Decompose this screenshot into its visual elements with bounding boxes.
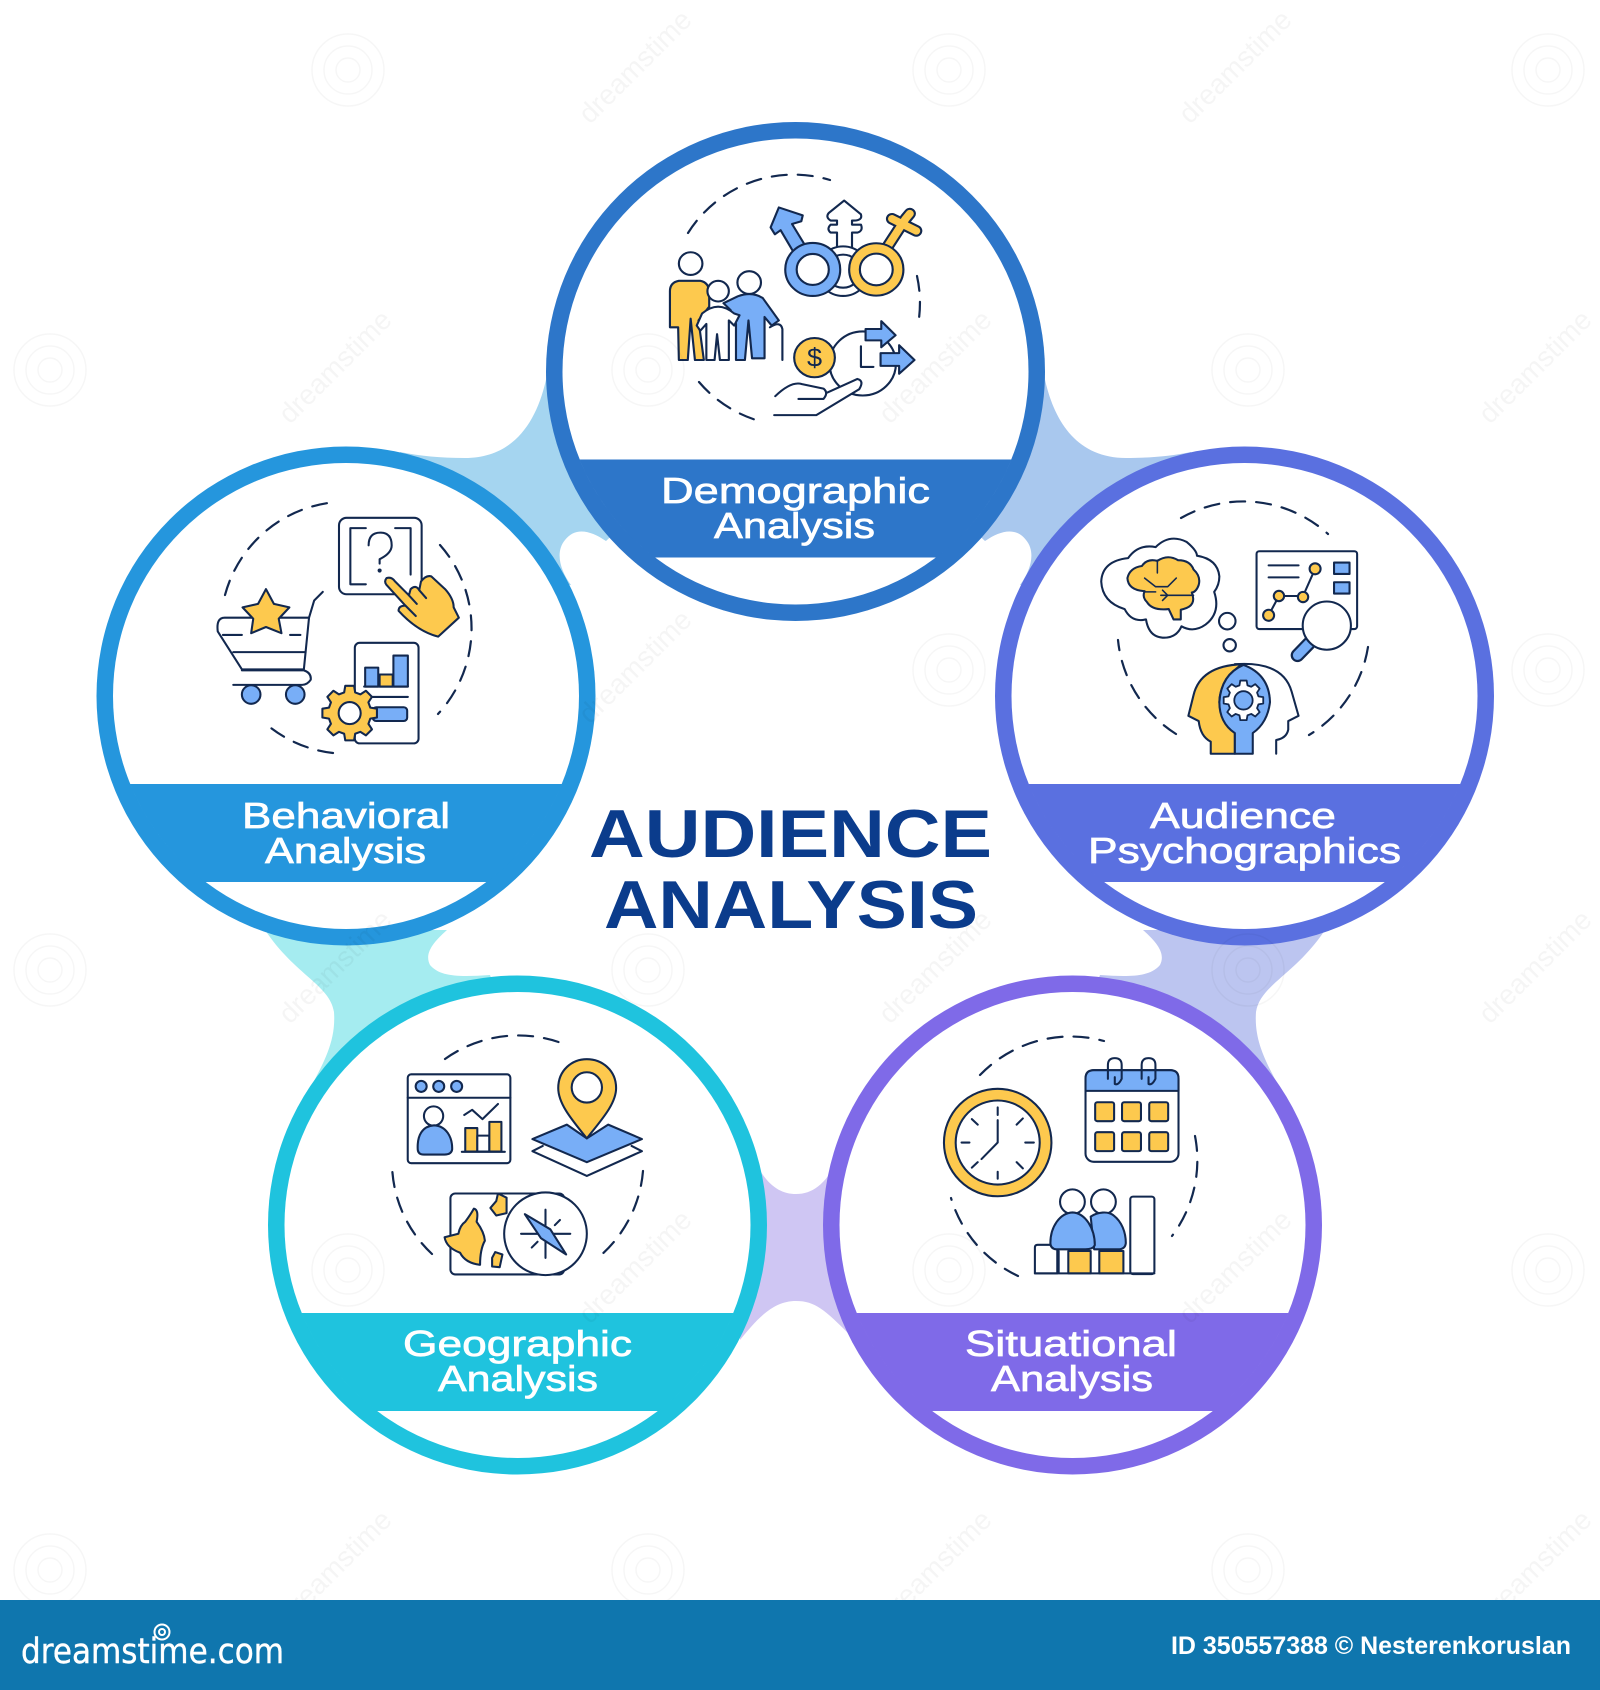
panel: behavioral analysis: Analysis (265, 830, 426, 871)
watermark pattern: dreamstime (272, 304, 398, 429)
icon: gender symbols, family, money and time: $ (807, 343, 822, 372)
ring and band (995, 446, 1494, 946)
watermark pattern: dreamstime (572, 4, 698, 129)
label: Geographic (403, 1323, 632, 1364)
title: AUDIENCE (589, 796, 992, 872)
connector: psychographics to situational (1090, 930, 1325, 1085)
dashed orbit (392, 1035, 643, 1256)
panel: situational analysis (823, 976, 1322, 1474)
watermark pattern: dreamstime (272, 1504, 398, 1629)
watermark pattern: dreamstime (1472, 904, 1598, 1029)
icon: logo swirl (154, 1624, 170, 1640)
icon: dashboard, location pin, map and compass (408, 1059, 642, 1275)
panel: demographic analysis (546, 122, 1045, 621)
ring and band (268, 976, 767, 1474)
panel: demographic analysis: Analysis (714, 505, 875, 546)
panel: audience psychographics: Psychographics (1088, 830, 1401, 871)
title (589, 796, 992, 943)
watermark pattern: dreamstime (1172, 4, 1298, 129)
title: ANALYSIS (604, 867, 978, 943)
watermark pattern: dreamstime (1472, 304, 1598, 429)
watermark pattern: dreamstime (272, 904, 398, 1029)
footer credit text: ID 350557388 © Nesterenkoruslan (1171, 1632, 1571, 1660)
footer bar (0, 1600, 1600, 1690)
watermark pattern: dreamstime (872, 304, 998, 429)
ring and band (823, 976, 1322, 1474)
dashed orbit (1118, 501, 1368, 735)
label: Behavioral (242, 795, 450, 836)
label: Demographic (661, 470, 930, 511)
dashed orbit (225, 502, 472, 753)
panel: geographic analysis: Analysis (438, 1358, 598, 1399)
label: Audience (1150, 795, 1336, 836)
watermark pattern: dreamstime (872, 1504, 998, 1629)
icon: brain, chart, heads (1101, 539, 1357, 754)
label: Situational (965, 1323, 1177, 1364)
watermark pattern: dreamstime (572, 604, 698, 729)
connector: behavioral to geographic (265, 930, 500, 1085)
connector: demographic to behavioral (400, 330, 650, 600)
icon: gender symbols, family, money and time (670, 201, 916, 415)
panel: behavioral analysis (96, 446, 596, 946)
panel: geographic analysis (268, 976, 767, 1474)
watermark pattern: dreamstime (872, 904, 998, 1029)
ring and band (96, 446, 596, 946)
footer logo text: dreamstime.com (21, 1632, 284, 1672)
panel: audience psychographics (995, 446, 1494, 946)
dashed orbit (951, 1037, 1197, 1276)
icon: cart, question tablet, report (217, 518, 459, 743)
watermark pattern: dreamstime (572, 1204, 698, 1329)
watermark pattern: dreamstime (1172, 1204, 1298, 1329)
icon: clock, calendar, people and bars (944, 1058, 1179, 1274)
connector: geographic to situational (740, 1155, 850, 1340)
ring and band (546, 122, 1045, 621)
dashed orbit (688, 175, 920, 420)
watermark pattern: dreamstime (1472, 1504, 1598, 1629)
panel: situational analysis: Analysis (991, 1358, 1153, 1399)
connector: demographic to psychographics (941, 330, 1191, 600)
